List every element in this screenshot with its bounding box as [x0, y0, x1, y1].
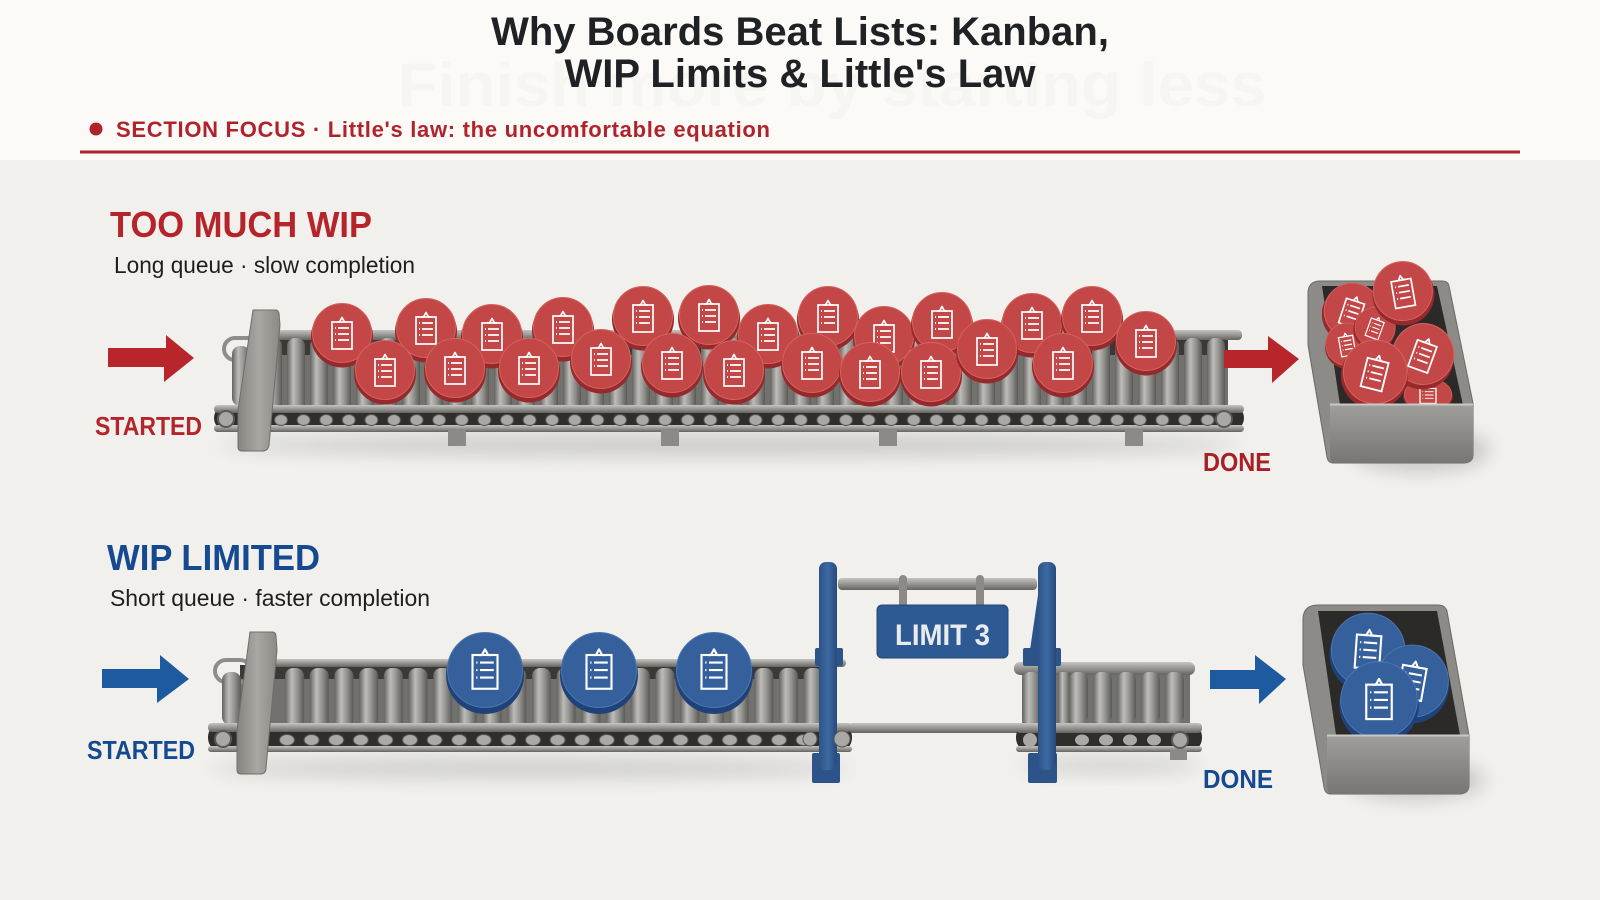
left upright — [803, 562, 850, 783]
conveyor: left section — [208, 632, 852, 778]
arrow: started red — [108, 335, 194, 382]
panel: WIP limited — [87, 537, 1485, 800]
conveyor: too much WIP — [214, 310, 1244, 457]
ghost subtitle: Finish more by starting less — [398, 51, 1266, 120]
conveyor: right section — [1014, 662, 1202, 773]
work discs: long queue — [311, 286, 1177, 406]
sign: limit 3 — [877, 605, 1008, 658]
title — [491, 10, 1109, 96]
label: started red: STARTED — [95, 411, 202, 441]
right upright — [1023, 562, 1061, 783]
arrow: started blue — [102, 655, 189, 703]
work discs: three in progress — [446, 632, 753, 714]
heading: WIP limited: WIP LIMITED — [107, 537, 320, 578]
label: done blue: DONE — [1203, 764, 1273, 794]
heading: too much WIP: TOO MUCH WIP — [110, 204, 372, 245]
title: WIP Limits & Little's Law — [564, 52, 1036, 96]
connecting rod — [850, 723, 1025, 733]
arrow: done blue — [1210, 655, 1286, 704]
WIP limit gate — [803, 562, 1061, 783]
title: Why Boards Beat Lists: Kanban, — [491, 10, 1109, 54]
label: done red: DONE — [1203, 447, 1271, 477]
subtext: long queue: Long queue · slow completion — [114, 252, 415, 278]
section focus label: SECTION FOCUS · Little's law: the uncomfortable equation — [116, 117, 770, 142]
subtext: short queue: Short queue · faster completion — [110, 585, 430, 611]
label: started blue: STARTED — [87, 735, 195, 765]
sign: limit 3: LIMIT 3 — [895, 619, 990, 652]
panel: too much WIP — [95, 204, 1490, 477]
bin: done red — [1308, 257, 1490, 472]
bin: done blue — [1303, 605, 1485, 800]
arrow: done red — [1224, 336, 1299, 383]
